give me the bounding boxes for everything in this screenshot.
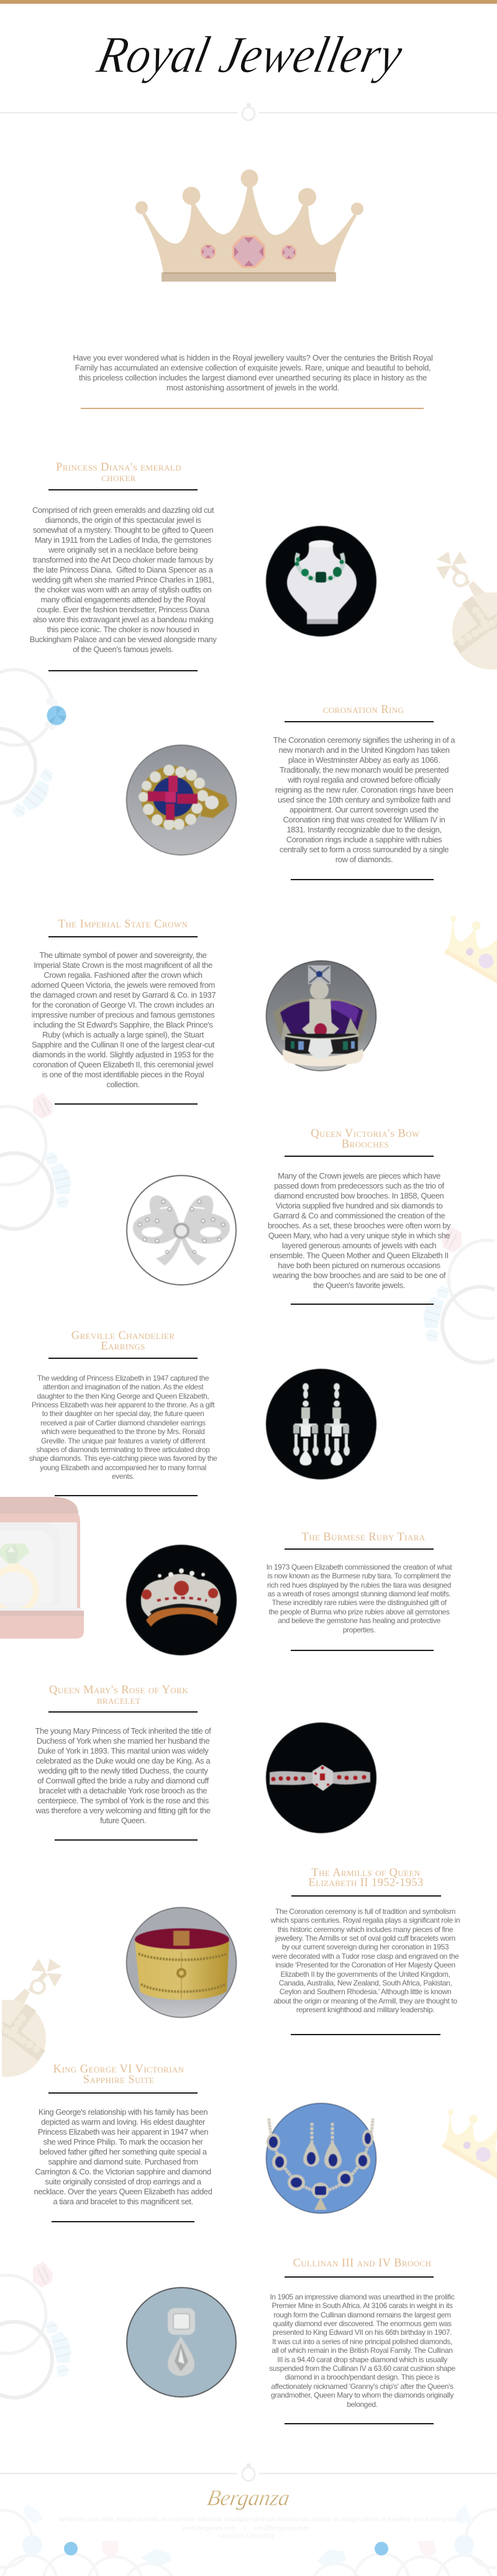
panel: Queen Mary's Rose of York bracelet	[35, 1683, 377, 1841]
photo: diamond bow brooch	[125, 1175, 237, 1286]
text block: III is a 94.40 carat drop shape diamond which is usually	[277, 2355, 447, 2364]
blue gem rings decoration	[0, 669, 66, 824]
text block	[268, 1171, 451, 1290]
text block: centerpiece. The symbol of York is the rose and this	[37, 1796, 209, 1805]
text block: In 1973 Queen Elizabeth commissioned the creation of what	[267, 1563, 452, 1571]
text block: used since the 10th century and symbolize faith and	[278, 795, 450, 804]
text block: inside 'Presented for the Coronation of Her Majesty Queen	[275, 1961, 455, 1969]
text block: future Queen.	[100, 1816, 146, 1825]
text block: Princess Elizabeth was heir apparent in 1947 when	[38, 2127, 208, 2137]
text block: Carrington & Co. the Victorian sapphire and diamond	[35, 2167, 211, 2176]
heading: Queen Victoria's Bow	[311, 1128, 420, 1140]
text block: this piece iconic. The choker is now housed in	[47, 625, 199, 634]
gold rule	[81, 408, 424, 409]
heading: Brooches	[342, 1138, 389, 1150]
photo: ruby bracelet	[265, 1722, 377, 1834]
bottom divider with ring	[0, 2462, 497, 2484]
text block: a tiara and bracelet to this magnificent set.	[53, 2197, 193, 2206]
text block: Crown regalia. Fashioned after the crown which	[43, 970, 203, 980]
text block: of the Queen's famous jewels.	[73, 645, 173, 654]
text block: adorned Queen Victoria, the jewels were removed from	[31, 980, 215, 990]
text block: 1831. Instantly recognizable due to the design,	[286, 825, 442, 834]
heading: Greville Chandelier	[71, 1329, 175, 1341]
heading	[49, 1683, 188, 1707]
text block: Imperial State Crown is the most magnificent of all the	[34, 960, 212, 970]
text block: brooches. As a set, these brooches were often worn by	[268, 1221, 450, 1230]
text block: Premier Mine in South Africa. At 3106 carats in weight in its	[272, 2301, 452, 2310]
text block: shapes of diamonds terminating to three articulated drop	[37, 1445, 209, 1454]
text block: Traditionally, the new monarch would be presented	[280, 765, 449, 775]
heading: Elizabeth II 1952-1953	[308, 1876, 424, 1888]
text block: represent knighthood and military leadership.	[296, 2005, 434, 2014]
photo: sapphire suite	[265, 2102, 377, 2214]
text block: Ceylon and Southern Rhodesia.' Although little is known	[280, 1987, 451, 1996]
photo: chandelier earrings	[265, 1368, 377, 1480]
heading: The Imperial State Crown	[58, 918, 188, 930]
text block: impressive number of precious and famous gemstones	[32, 1010, 214, 1019]
text block: about the origin or meaning of the Armill, they are thought to	[273, 1997, 457, 2005]
text block: diamonds in the world. Slightly adjusted in 1953 for the	[32, 1050, 214, 1059]
text block: Comprised of rich green emeralds and dazzling old cut	[32, 505, 214, 515]
top bar	[0, 0, 497, 4]
text block: suspended from the Cullinan IV a 63.60 carat cushion shape	[269, 2364, 455, 2373]
heading	[56, 461, 181, 484]
text block: diamonds, the origin of this spectacular jewel is	[45, 515, 201, 525]
text block: reigning as the new ruler. Coronation rings have been	[275, 785, 453, 794]
text block: the choker was worn with an array of stylish outfits on	[35, 585, 211, 594]
heading	[71, 1329, 175, 1353]
heading	[311, 1128, 420, 1150]
text block: the late Princess Diana. Gifted to Diana Spencer as a	[34, 565, 212, 574]
footer text: Whatever your style, Berganza holds an extensive collection of unique hand cut diamond set antique or vintage pieces of jewellery to suit every taste.	[59, 2516, 462, 2523]
heading: Princess Diana's emerald	[56, 461, 181, 474]
text block: coronation of Queen Elizabeth II, this ceremonial jewel	[33, 1060, 213, 1069]
text block: Mary in 1911 from the Ladies of India, the gemstones	[35, 535, 211, 545]
text block: properties.	[343, 1626, 375, 1634]
text block: the damaged crown and reset by Garrard & Co. in 1937	[30, 990, 216, 1000]
text block: depicted as warm and loving. His eldest daughter	[41, 2117, 205, 2127]
text block: the Queen's favorite jewels.	[313, 1281, 405, 1290]
main crown illustration	[135, 169, 363, 282]
text block: belonged.	[347, 2400, 378, 2409]
heading: Sapphire Suite	[83, 2074, 154, 2086]
intro text	[73, 353, 433, 392]
text block: These incredibly rare rubies were the distinguished gift of	[271, 1598, 447, 1607]
heading: The Armills of Queen	[311, 1867, 421, 1879]
text block: daughter to the then King George and Queen Elizabeth,	[37, 1392, 209, 1401]
text block: of Cornwall gifted the bride a ruby and diamond cuff	[37, 1776, 209, 1785]
text block: place in Westminster Abbey as early as 1066.	[288, 755, 440, 765]
text block: as a wreath of roses amongst stunning diamond leaf motifs.	[268, 1589, 450, 1598]
background decorations	[0, 551, 497, 2576]
text block: which spans centuries. Royal regalia plays a significant role in	[271, 1916, 460, 1925]
text block: row of diamonds.	[335, 855, 393, 864]
text block: shape diamonds. This eye-catching piece was favored by the	[29, 1454, 217, 1463]
text block: wedding gift when she married Prince Charles in 1981,	[32, 575, 214, 584]
heading	[53, 2063, 184, 2086]
text block: events.	[112, 1472, 134, 1481]
text block: celebrated as the Duke would one day be King. As a	[36, 1756, 210, 1765]
text block: somewhat of a mystery. Thought to be gifted to Queen	[33, 525, 213, 535]
crown decoration right upper	[434, 902, 497, 1000]
text block	[34, 2107, 212, 2206]
text block	[273, 735, 455, 864]
text block: layered generous amounts of jewels with each	[282, 1241, 436, 1250]
text block: the people of Burma who prize rubies above all gemstones	[269, 1608, 449, 1616]
text block: is now known as the Burmese ruby tiara. To compliment the	[268, 1571, 450, 1580]
text block: suite originally consisted of drop earrings and a	[45, 2177, 201, 2186]
text block: were decorated with a Tudor rose clasp and engraved on the	[272, 1952, 458, 1961]
intro text: most astonishing assortment of jewels in the world.	[166, 383, 339, 392]
text block: The wedding of Princess Elizabeth in 1947 captured the	[37, 1374, 209, 1382]
heading: choker	[101, 471, 136, 484]
panel: The Burmese Ruby Tiara	[125, 1530, 452, 1656]
crown decoration right lower	[431, 2095, 497, 2193]
pink gem rings decoration left	[0, 1093, 76, 1229]
text block: The Coronation ceremony is full of tradition and symbolism	[275, 1907, 455, 1916]
text block: Canada, Australia, New Zealand, South Africa, Pakistan,	[279, 1979, 452, 1987]
footer text: www.berganza.com | info@berganza.com	[182, 2525, 309, 2532]
orb decoration right	[436, 551, 497, 669]
text block: wedding gift to the newly titled Duchess, the county	[39, 1766, 207, 1775]
text block	[30, 950, 216, 1089]
text block: Greville. The unique pair features a variety of different	[41, 1437, 205, 1445]
text block	[271, 1907, 460, 2014]
orb decoration left	[0, 1959, 62, 2077]
text block: affectionately nicknamed 'Granny's chip's' after the Queen's	[271, 2382, 454, 2391]
intro text: this priceless collection includes the largest diamond ever unearthed securing its place in history as the	[79, 373, 427, 382]
text block	[35, 1726, 211, 1825]
text block: diamond encrusted bow brooches. In 1858, Queen	[275, 1191, 444, 1200]
text block: Coronation ring that was created for William IV in	[283, 815, 445, 824]
heading: Earrings	[101, 1340, 145, 1353]
text block: jewellery. The Armills or set of oval gold cuff bracelets worn	[275, 1934, 455, 1943]
text block: Garrard & Co and commissioned the creation of the	[273, 1211, 445, 1220]
text block: wearing the bow brooches and are said to be one of	[273, 1271, 445, 1280]
pink gem rings decoration right	[418, 1226, 497, 1363]
intro text: Family has accumulated an extensive collection of exquisite jewels. Rare, unique and beautiful to behold,	[75, 363, 431, 372]
text block	[30, 505, 217, 654]
heading	[308, 1867, 424, 1888]
text block: Many of the Crown jewels are pieces which have	[278, 1171, 440, 1180]
text block: Ruby (which is actually a large spinel), the Stuart	[42, 1030, 204, 1039]
text block: King George's relationship with his family has been	[39, 2107, 207, 2117]
text block: Queen Mary, who had a very unique style in which she	[268, 1231, 450, 1240]
text block: Coronation rings include a sapphire with rubies	[286, 835, 442, 844]
text block: for the coronation of George VI. The crown includes an	[32, 1000, 214, 1010]
text block: to their daughter on her special day, the future queen	[42, 1409, 204, 1418]
text block: beloved father gifted her something quite special a	[39, 2147, 207, 2156]
text block: including the St Edward's Sapphire, the Black Prince's	[34, 1020, 212, 1029]
heading: The Burmese Ruby Tiara	[302, 1530, 425, 1543]
text block: grandmother, Queen Mary to whom the diamonds originally	[271, 2391, 454, 2399]
text block: The ultimate symbol of power and sovereignty, the	[40, 950, 206, 960]
text block: all of which remain in the British Royal Family. The Cullinan	[271, 2346, 453, 2355]
text block: were originally set in a necklace before being	[48, 545, 198, 554]
text block: necklace. Over the years Queen Elizabeth has added	[34, 2187, 212, 2196]
text block: rich red hues displayed by the rubies the tiara was designed	[267, 1581, 451, 1589]
heading: Queen Mary's Rose of York	[49, 1683, 188, 1696]
text block: appointment. Our current sovereign used the	[290, 805, 439, 814]
text block	[269, 2293, 455, 2409]
text block: she wed Prince Philip. To mark the occasion her	[43, 2137, 203, 2146]
text block: by our current sovereign during her coronation in 1953	[282, 1943, 449, 1951]
text block: diamond in a brooch/pendant design. This piece is	[285, 2373, 439, 2381]
text block: Elizabeth II by the governments of the United Kingdom,	[281, 1970, 450, 1979]
text block: Victoria supplied five hundred and six diamonds to	[276, 1201, 442, 1210]
text block: new monarch and in the United Kingdom has taken	[278, 745, 450, 755]
text block: In 1905 an impressive diamond was unearthed in the prolific	[270, 2293, 455, 2301]
text block: transformed into the Art Deco choker made famous by	[33, 555, 213, 564]
panel: The Armills of Queen Elizabeth II	[125, 1867, 460, 2035]
text block: young Elizabeth and accompanied her to many formal	[40, 1463, 206, 1472]
text block: Princess Elizabeth was heir apparent to the throne. As a gift	[32, 1401, 214, 1409]
text block: was therefore a very welcoming and fitting gift for the	[35, 1806, 211, 1815]
text block: Duchess of York when she married her husband the	[37, 1736, 209, 1746]
photo: Imperial State Crown	[265, 960, 377, 1072]
heading: Cullinan III and IV Brooch	[293, 2256, 431, 2269]
panel: Queen Victoria's Bow Brooches	[125, 1128, 451, 1305]
left gem	[201, 244, 216, 259]
panel: The Imperial State Crown	[30, 918, 377, 1105]
text block: have both been pictured on numerous occasions	[278, 1261, 440, 1270]
text block: centrally set to form a cross surrounded by a single	[280, 845, 449, 854]
panel: Greville Chandelier Earrings	[29, 1329, 377, 1496]
text block: received a pair of Cartier diamond chandelier earrings	[40, 1419, 206, 1427]
text block	[267, 1563, 452, 1634]
photo: gold armills	[125, 1907, 237, 2018]
photo: Cullinan brooch	[125, 2286, 237, 2398]
top divider with ring	[0, 103, 497, 121]
footer text	[59, 2516, 432, 2541]
text block: which were bequeathed to the throne by Mrs. Ronald	[42, 1427, 204, 1436]
text block: and believe the gemstone has healing and protective	[278, 1616, 440, 1625]
photo: coronation ring	[125, 744, 237, 856]
footer rings decoration	[0, 2504, 497, 2576]
right gem	[281, 245, 296, 260]
text block: presented to King Edward VII on his 66th birthday in 1907.	[273, 2328, 452, 2337]
text block: also wore this extravagant jewel as a bandeau making	[33, 615, 213, 624]
text block: Duke of York in 1893. This marital union was widely	[38, 1746, 208, 1755]
text block: many official engagements attended by the Royal	[41, 595, 205, 604]
ring box decoration	[0, 1497, 84, 1639]
panel: Cullinan III and IV Brooch	[125, 2256, 455, 2424]
panel: Coronation Ring	[125, 704, 455, 880]
text block: quality diamond ever discovered. The enormous gem was	[273, 2319, 452, 2328]
text block: is one of the most identifiable pieces in the Royal	[42, 1070, 204, 1079]
heading: coronation Ring	[323, 704, 404, 716]
central gem	[232, 236, 265, 268]
text block: It was cut into a series of nine principal polished diamonds,	[272, 2337, 452, 2346]
footer text: +44 (0)20 7430 0393	[217, 2533, 274, 2540]
text block: Sapphire and the Cullinan II one of the largest clear-cut	[32, 1040, 214, 1049]
text block: couple. Ever the fashion trendsetter, Princess Diana	[37, 605, 209, 614]
panel: Princess Diana's emerald choker	[30, 461, 377, 671]
pink gem rings decoration lower left	[0, 2261, 76, 2398]
text block: collection.	[106, 1080, 140, 1089]
text block: passed down from predecessors such as the trio of	[274, 1181, 444, 1190]
text block: The young Mary Princess of Teck inherited the title of	[35, 1726, 211, 1736]
panel: King George VI Victorian Sapphire Suite	[34, 2063, 377, 2222]
text block: Buckingham Palace and can be viewed alongside many	[30, 635, 216, 644]
text block	[29, 1374, 217, 1481]
text block: rough form the Cullinan diamond remains the largest gem	[273, 2311, 451, 2319]
heading: King George VI Victorian	[53, 2063, 184, 2075]
photo: emerald choker on bust	[265, 525, 377, 637]
text block: bracelet with a detachable York rose brooch as the	[39, 1786, 207, 1795]
crown band	[162, 272, 336, 282]
text block: The Coronation ceremony signifies the ushering in of a	[273, 735, 455, 745]
heading: bracelet	[97, 1695, 140, 1707]
text block: sapphire and diamond suite. Purchased from	[48, 2157, 198, 2166]
photo: Burmese ruby tiara	[125, 1544, 237, 1656]
text block: this historic ceremony which includes many pieces of fine	[278, 1925, 453, 1934]
text block: with royal regalia and crowned before officially	[288, 775, 440, 784]
intro text: Have you ever wondered what is hidden in the Royal jewellery vaults? Over the centuries the British Royal	[73, 353, 433, 362]
text block: attention and imagination of the nation. As the eldest	[43, 1382, 203, 1391]
text block: ensemble. The Queen Mother and Queen Elizabeth II	[270, 1251, 449, 1260]
